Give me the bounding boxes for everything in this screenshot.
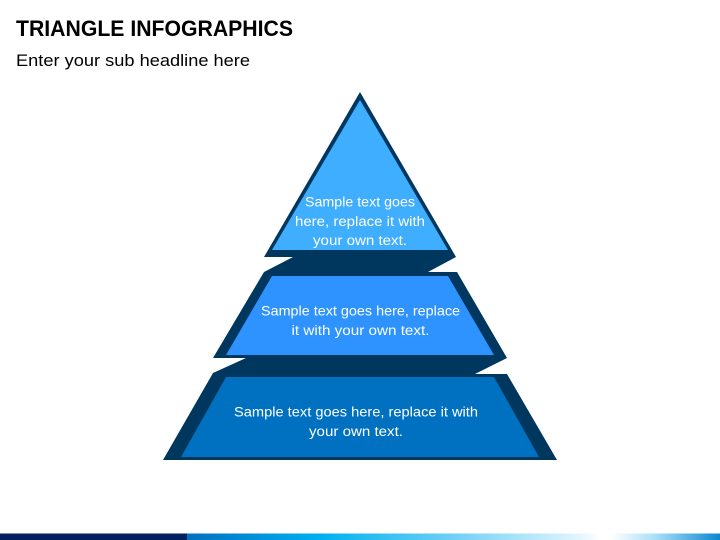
- tier 2: middle trapezoid: [226, 276, 494, 355]
- tier 3: bottom trapezoid: Sample text goes here, replace it with: [234, 405, 478, 420]
- tier 2: middle trapezoid: Sample text goes here, replace: [261, 304, 460, 319]
- tier 1: top triangle: Sample text goes: [305, 194, 415, 210]
- tier 1: top triangle: [272, 100, 448, 250]
- tier 1: top triangle: your own text.: [313, 233, 407, 248]
- tier 1: top triangle: here, replace it with: [295, 214, 425, 229]
- footer gradient bar: [0, 534, 720, 540]
- subtitle: Enter your sub headline here: [16, 51, 250, 70]
- title: TRIANGLE INFOGRAPHICS: [16, 16, 293, 41]
- tier 2: middle trapezoid: it with your own text.: [292, 323, 430, 338]
- tier 3: bottom trapezoid: [181, 377, 539, 457]
- pyramid dark backing shape: [163, 92, 557, 460]
- tier 3: bottom trapezoid: your own text.: [309, 424, 403, 439]
- pyramid infographic: [163, 92, 557, 460]
